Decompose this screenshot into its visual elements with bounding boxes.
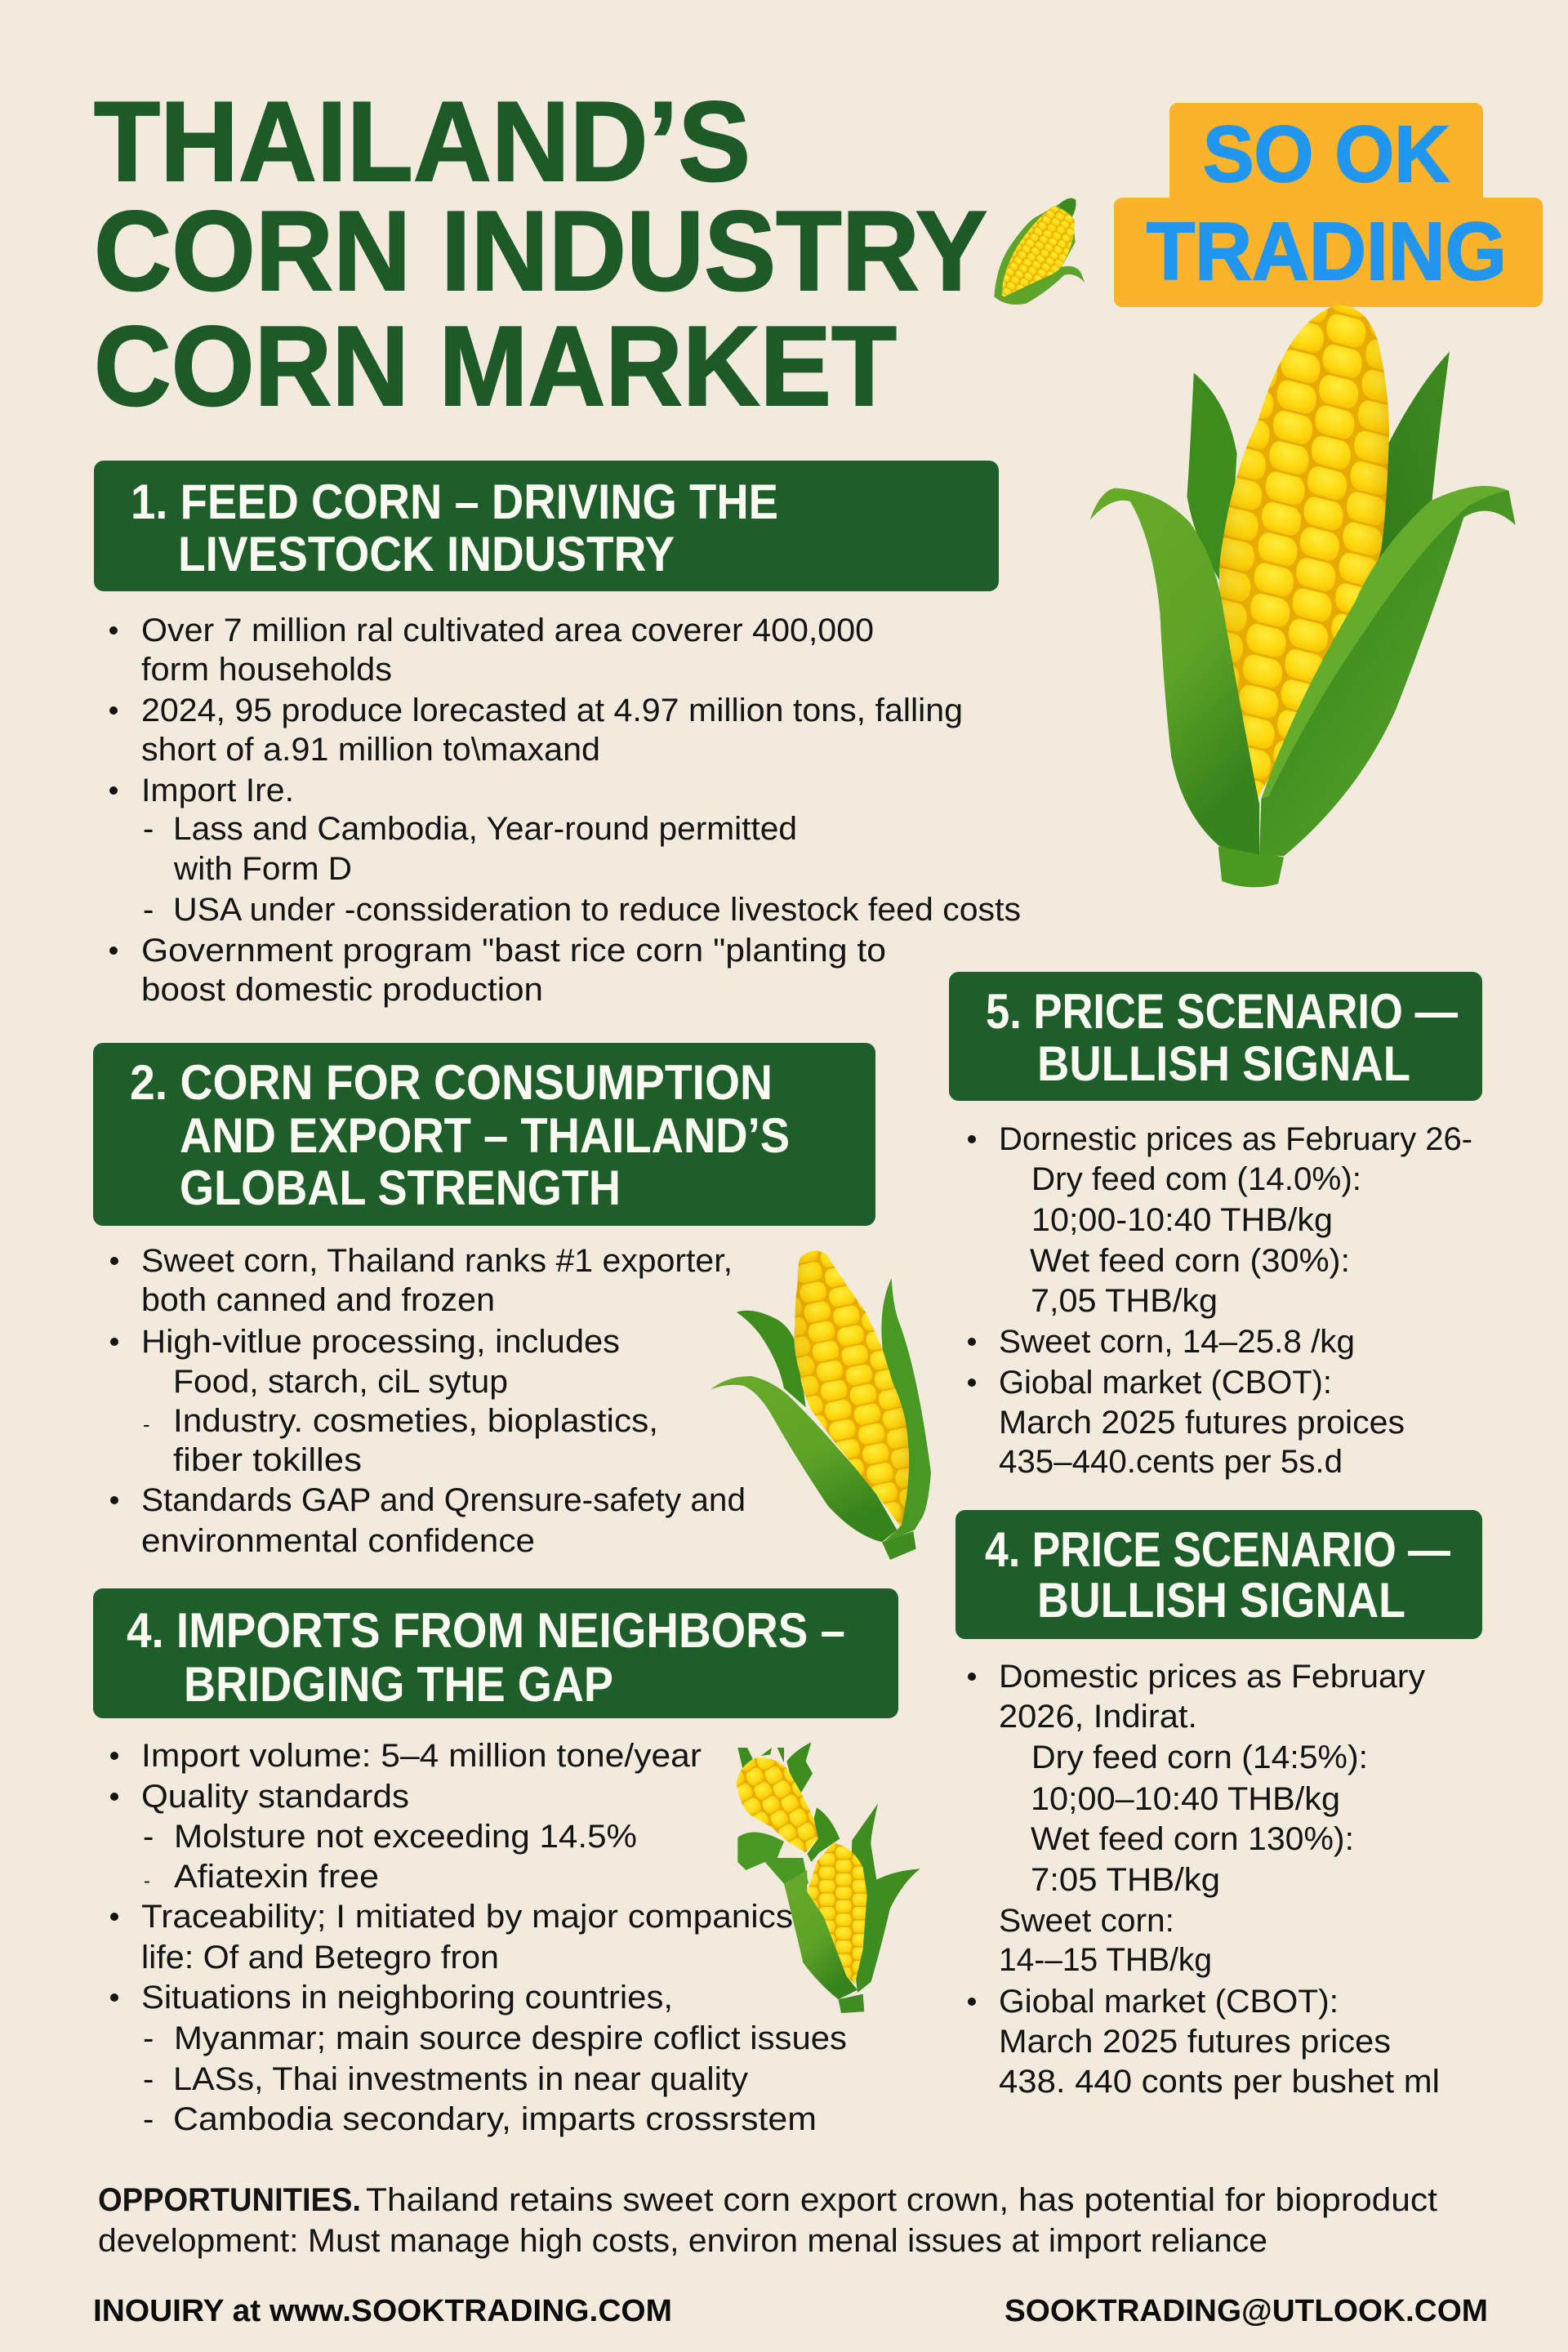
text block: price scenario bullets: Dry feed corn (14:5%): bbox=[1031, 1740, 1368, 1775]
text block: section 5 bullets: Sweet corn, 14–25.8 /kg bbox=[999, 1324, 1355, 1360]
text block: section 2 bullets: High-vitlue processing, includes bbox=[141, 1324, 620, 1360]
logo badge: SO OK TRADING bbox=[1114, 103, 1543, 307]
text block: section 5 bullets: March 2025 futures proices bbox=[999, 1405, 1405, 1441]
text block: section 2 bullets: fiber tokilles bbox=[173, 1442, 362, 1478]
icon: double corn beside imports bbox=[737, 1742, 920, 2013]
title: THAILAND’S bbox=[94, 78, 751, 205]
title: CORN INDUSTRY bbox=[94, 188, 987, 314]
text block: imports bullets: - bbox=[143, 2101, 154, 2137]
text block: price scenario bullets: Sweet corn: bbox=[999, 1903, 1174, 1939]
text block: opportunities: Thailand retains sweet corn export crown, has potential for bioproduct bbox=[366, 2182, 1437, 2218]
text block: section 5 bullets: Wet feed corn (30%): bbox=[1030, 1243, 1350, 1279]
heading: price scenario repeat: BULLISH SIGNAL bbox=[1037, 1573, 1405, 1628]
text block: price scenario bullets: 10;00–10:40 THB/kg bbox=[1031, 1781, 1340, 1817]
logo badge: SO OK TRADING: SO OK bbox=[1203, 109, 1450, 198]
text block: section 5 bullets: 10;00-10:40 THB/kg bbox=[1031, 1202, 1333, 1238]
text block: section 1 bullets: Government program "bast rice corn "planting to bbox=[141, 933, 886, 969]
text block: imports bullets: Molsture not exceeding 14.5% bbox=[174, 1819, 637, 1855]
heading: section 1 bbox=[94, 461, 999, 591]
text block: section 2 bullets: both canned and frozen bbox=[141, 1282, 495, 1318]
heading: section 5: BULLISH SIGNAL bbox=[1037, 1036, 1410, 1091]
heading: imports: BRIDGING THE GAP bbox=[184, 1657, 613, 1712]
text block: imports bullets: - bbox=[143, 2061, 154, 2097]
text block: section 5 bullets: Giobal market (CBOT): bbox=[999, 1365, 1332, 1401]
text block: section 1 bullets: USA under -conssideration to reduce livestock feed costs bbox=[173, 892, 1021, 928]
text block: section 1 bullets: form households bbox=[141, 652, 392, 688]
text block: section 2 bullets: Sweet corn, Thailand ranks #1 exporter, bbox=[141, 1243, 733, 1279]
text block: imports bullets: Import volume: 5–4 million tone/year bbox=[141, 1738, 702, 1774]
text block: opportunities: development: Must manage high costs, environ menal issues at import reliance bbox=[98, 2223, 1267, 2259]
heading: section 1: LIVESTOCK INDUSTRY bbox=[178, 527, 675, 581]
heading: section 2: AND EXPORT – THAILAND’S bbox=[180, 1108, 790, 1163]
icon: corn beside section 2 bbox=[710, 1251, 931, 1560]
panel: 5 price scenario bbox=[949, 972, 1482, 1480]
text block: section 1 bullets bbox=[109, 612, 1021, 1008]
text block: price scenario bullets: 2026, Indirat. bbox=[999, 1699, 1197, 1735]
title bbox=[94, 78, 987, 430]
icon: small corn beside title bbox=[994, 198, 1085, 305]
text block: imports bullets: - bbox=[143, 2020, 154, 2056]
text block: price scenario bullets: 438. 440 conts per bushet ml bbox=[999, 2064, 1440, 2100]
heading: imports: 4. IMPORTS FROM NEIGHBORS – bbox=[127, 1603, 845, 1658]
text block: section 2 bullets: - bbox=[143, 1412, 150, 1437]
text block: section 1 bullets: Over 7 million ral cultivated area coverer 400,000 bbox=[141, 612, 874, 648]
panel: 4 price scenario bbox=[956, 1510, 1482, 2100]
text block: section 5 bullets: Dornestic prices as February 26- bbox=[999, 1121, 1472, 1157]
text block: section 1 bullets: 2024, 95 produce lorecasted at 4.97 million tons, falling bbox=[141, 693, 963, 728]
text block: imports bullets: Cambodia secondary, imparts crossrstem bbox=[173, 2101, 817, 2137]
icon: large corn cob with husk bbox=[1090, 305, 1516, 887]
text block: imports bullets: LASs, Thai investments in near quality bbox=[173, 2061, 748, 2097]
heading: price scenario repeat bbox=[956, 1510, 1482, 1639]
title: CORN MARKET bbox=[94, 303, 897, 430]
text block: imports bullets: - bbox=[144, 1870, 150, 1892]
panel: 2 corn for consumption and export bbox=[93, 1043, 931, 1560]
text block: price scenario bullets bbox=[968, 1659, 1440, 2100]
text block: section 2 bullets bbox=[110, 1243, 746, 1559]
text block: section 2 bullets: Food, starch, ciL sytup bbox=[173, 1364, 508, 1400]
text block: opportunities: OPPORTUNITIES. bbox=[98, 2182, 361, 2218]
text block: section 1 bullets: short of a.91 million to\maxand bbox=[141, 732, 600, 768]
text block: price scenario bullets: 14-–15 THB/kg bbox=[999, 1942, 1212, 1978]
text block: opportunities bbox=[98, 2182, 1437, 2259]
text block: price scenario bullets: Domestic prices as February bbox=[999, 1659, 1425, 1695]
text block: section 5 bullets: Dry feed com (14.0%): bbox=[1031, 1161, 1361, 1197]
heading: section 5 bbox=[949, 972, 1482, 1101]
heading: section 2: GLOBAL STRENGTH bbox=[180, 1160, 621, 1215]
text block: price scenario bullets: Wet feed corn 130%): bbox=[1031, 1821, 1354, 1857]
text block: section 1 bullets: Lass and Cambodia, Year-round permitted bbox=[173, 811, 797, 847]
text block: section 1 bullets: - bbox=[143, 811, 154, 847]
text block: section 5 bullets: 7,05 THB/kg bbox=[1031, 1283, 1218, 1319]
text block: section 5 bullets: 435–440.cents per 5s.d bbox=[999, 1444, 1343, 1480]
text block: section 2 bullets: environmental confidence bbox=[141, 1523, 535, 1559]
text block: imports bullets: Myanmar; main source despire coflict issues bbox=[174, 2020, 847, 2056]
text block: imports bullets: Traceability; I mitiated by major companics bbox=[141, 1899, 793, 1935]
heading: section 1: 1. FEED CORN – DRIVING THE bbox=[131, 474, 778, 529]
heading: section 2: 2. CORN FOR CONSUMPTION bbox=[130, 1055, 773, 1110]
text block: section 2 bullets: Industry. cosmeties, bioplastics, bbox=[173, 1403, 658, 1439]
heading: price scenario repeat: 4. PRICE SCENARIO — bbox=[985, 1522, 1450, 1577]
text block: imports bullets: life: Of and Betegro fron bbox=[141, 1940, 499, 1976]
text block: section 1 bullets: with Form D bbox=[173, 851, 352, 887]
text block: section 2 bullets: Standards GAP and Qrensure-safety and bbox=[141, 1482, 746, 1518]
text block: imports bullets: Afiatexin free bbox=[174, 1859, 379, 1895]
text block: price scenario bullets: Giobal market (CBOT): bbox=[999, 1984, 1339, 2020]
heading: section 2 bbox=[93, 1043, 875, 1226]
text block: price scenario bullets: 7:05 THB/kg bbox=[1031, 1862, 1220, 1898]
text block: section 1 bullets: - bbox=[143, 892, 154, 928]
text block: section 1 bullets: Import Ire. bbox=[141, 773, 294, 808]
text block: imports bullets: Quality standards bbox=[141, 1779, 409, 1815]
footer: inquiry website: INOUIRY at www.SOOKTRADING.COM bbox=[93, 2294, 672, 2328]
panel: 4 imports from neighbors bbox=[93, 1588, 920, 2137]
text block: section 5 bullets bbox=[968, 1121, 1472, 1480]
text block: imports bullets: - bbox=[143, 1819, 154, 1855]
text block: price scenario bullets: March 2025 futures prices bbox=[999, 2024, 1391, 2060]
text block: imports bullets bbox=[110, 1738, 847, 2137]
logo badge: SO OK TRADING: TRADING bbox=[1147, 206, 1507, 297]
text block: imports bullets: Situations in neighboring countries, bbox=[141, 1980, 673, 2016]
footer: email: SOOKTRADING@UTLOOK.COM bbox=[1004, 2294, 1488, 2328]
heading: section 5: 5. PRICE SCENARIO — bbox=[986, 984, 1458, 1039]
heading: imports bbox=[93, 1588, 898, 1718]
text block: section 1 bullets: boost domestic production bbox=[141, 972, 543, 1008]
panel: 1 feed corn bbox=[94, 461, 1021, 1008]
